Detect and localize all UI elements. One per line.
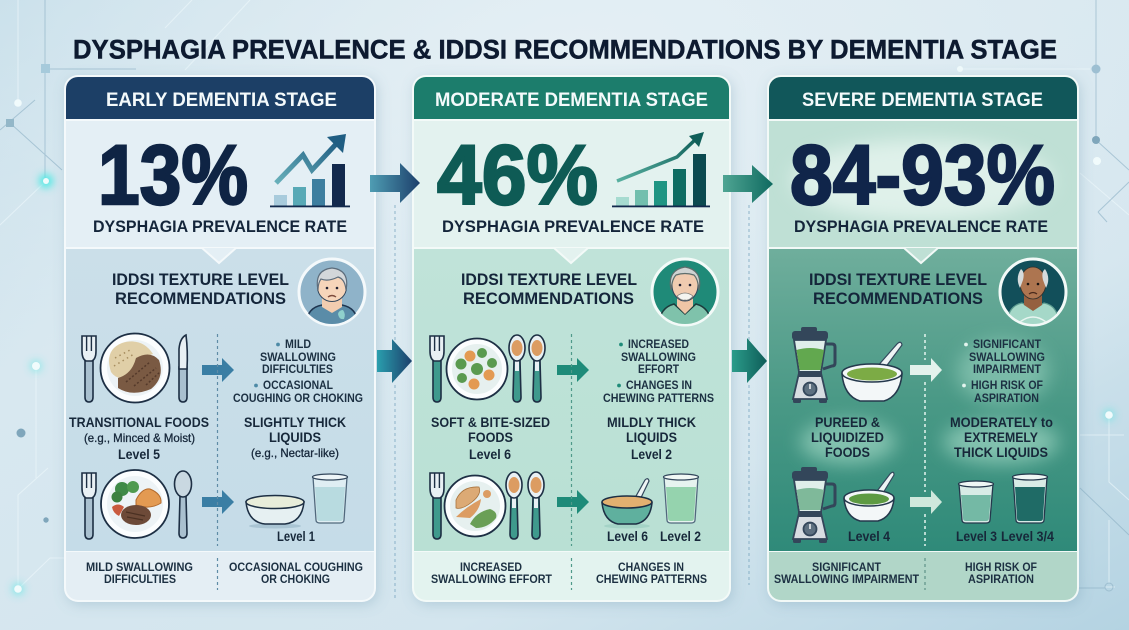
symptoms list: severe (962, 339, 1045, 405)
footer: early symptoms (86, 562, 363, 586)
symptoms list: early: OCCASIONAL (263, 380, 333, 392)
foods row 2: balanced plate (82, 470, 192, 539)
panel heading: early: EARLY DEMENTIA STAGE (106, 89, 337, 111)
footer: moderate symptoms: INCREASED (460, 562, 522, 574)
liquid label: mildly thick: Level 2 (631, 447, 672, 462)
liquid label: moderately to extremely thick: THICK LIQUIDS (954, 444, 1048, 460)
food label: soft and bite-sized (431, 414, 550, 462)
title: DYSPHAGIA PREVALENCE & IDDSI RECOMMENDATIONS BY DEMENTIA STAGE (73, 34, 1057, 64)
footer: moderate symptoms: CHANGES IN (618, 562, 684, 574)
icon: older man avatar (652, 259, 718, 326)
symptoms list: moderate: EFFORT (638, 364, 679, 376)
symptoms list: severe: SIGNIFICANT (973, 339, 1041, 351)
footer: severe symptoms: SWALLOWING IMPAIRMENT (774, 574, 919, 586)
heading: IDDSI recommendations: IDDSI TEXTURE LEVEL (112, 270, 289, 289)
arrow: severe row 1 (910, 358, 942, 382)
label: dysphagia prevalence rate: DYSPHAGIA PREVALENCE RATE (442, 217, 704, 236)
symptoms list: moderate (603, 339, 714, 405)
footer: early symptoms: MILD SWALLOWING (86, 562, 193, 574)
heading: IDDSI recommendations (809, 270, 987, 308)
liquid label: slightly thick liquids: LIQUIDS (269, 429, 321, 445)
statistic: 46%: 46% (437, 128, 598, 222)
statistic: 84-93%: 84-93% (790, 128, 1055, 222)
liquid label: mildly thick: MILDLY THICK (607, 414, 696, 430)
arrow: moderate to severe, prevalence (723, 165, 773, 203)
liquid label: moderately to extremely thick: MODERATELY to (950, 414, 1053, 430)
food label: pureed and liquidized: LIQUIDIZED (811, 429, 884, 445)
heading: IDDSI recommendations: RECOMMENDATIONS (813, 289, 983, 308)
footer: early symptoms: DIFFICULTIES (104, 574, 176, 586)
footer: moderate symptoms: CHEWING PATTERNS (596, 574, 707, 586)
foods row 1: blender and puree bowl (792, 327, 902, 403)
arrow: moderate row 2 (557, 490, 589, 514)
liquid label: moderately to extremely thick (950, 414, 1053, 460)
liquid label: slightly thick liquids (244, 414, 346, 460)
footer: severe symptoms: HIGH RISK OF (965, 562, 1037, 574)
icon: frail elder avatar (1000, 259, 1066, 326)
icon: older woman avatar (299, 259, 365, 326)
labels: level 6 and level 2 (607, 529, 701, 544)
heading: IDDSI recommendations (461, 270, 637, 308)
panel heading: moderate: MODERATE DEMENTIA STAGE (435, 89, 708, 111)
panel: early dementia stage (64, 75, 376, 602)
food label: pureed and liquidized (811, 414, 884, 460)
liquid label: moderately to extremely thick: EXTREMELY (964, 429, 1039, 445)
food label: transitional foods: TRANSITIONAL FOODS (69, 414, 209, 430)
foods row 1: bite-sized plate (430, 335, 545, 402)
label: level 1: Level 1 (277, 529, 315, 544)
symptoms list: early: COUGHING OR CHOKING (233, 393, 363, 405)
arrow: severe row 2 (910, 490, 942, 514)
label: level 4: Level 4 (848, 529, 890, 544)
label: dysphagia prevalence rate: DYSPHAGIA PREVALENCE RATE (794, 217, 1048, 236)
symptoms list: early: DIFFICULTIES (262, 364, 333, 376)
symptoms list: moderate: INCREASED (628, 339, 689, 351)
labels: level 6 and level 2: Level 2 (660, 529, 701, 544)
footer: moderate symptoms: SWALLOWING EFFORT (431, 574, 552, 586)
liquid label: slightly thick liquids: (e.g., Nectar-like) (251, 446, 339, 460)
labels: level 3 and level 3/4: Level 3/4 (1001, 529, 1054, 544)
symptoms list: moderate: SWALLOWING (621, 352, 696, 364)
icon: bowl and glass, levels 6 and 2 (602, 474, 698, 528)
food label: transitional foods (69, 414, 209, 462)
icon: bowl and glass, level 1 (246, 474, 348, 528)
foods row 2: blender and bowl (792, 467, 894, 543)
heading: IDDSI recommendations (112, 270, 289, 308)
symptoms list: severe: HIGH RISK OF (971, 380, 1043, 392)
panel: severe dementia stage (767, 75, 1079, 602)
footer: moderate symptoms (431, 562, 707, 586)
arrow: early to moderate, prevalence (370, 163, 420, 203)
footer: severe symptoms: ASPIRATION (968, 574, 1034, 586)
food label: transitional foods: (e.g., Minced & Moist) (84, 431, 195, 445)
statistic: 13%: 13% (98, 128, 248, 222)
symptoms list: moderate: CHEWING PATTERNS (603, 393, 714, 405)
footer: early symptoms: OCCASIONAL COUGHING (229, 562, 363, 574)
food label: soft and bite-sized: SOFT & BITE-SIZED (431, 414, 550, 430)
symptoms list: early (233, 339, 363, 405)
symptoms list: severe: ASPIRATION (974, 393, 1039, 405)
arrow: early to moderate, recommendations (377, 339, 412, 383)
arrow: early row 1 (202, 358, 234, 382)
chart icon: rising bars (612, 132, 710, 207)
heading: IDDSI recommendations: IDDSI TEXTURE LEVEL (809, 270, 987, 289)
footer: severe symptoms (774, 562, 1037, 586)
food label: pureed and liquidized: FOODS (825, 444, 870, 460)
arrow: early row 2 (202, 490, 234, 514)
icon: two glasses, levels 3 and 3/4 (958, 474, 1048, 523)
symptoms list: severe: IMPAIRMENT (973, 364, 1041, 376)
footer: early symptoms: OR CHOKING (261, 574, 330, 586)
liquid label: mildly thick: LIQUIDS (626, 429, 677, 445)
arrow: moderate row 1 (557, 358, 589, 382)
label: dysphagia prevalence rate: DYSPHAGIA PREVALENCE RATE (93, 217, 347, 236)
symptoms list: early: MILD (285, 339, 311, 351)
symptoms list: early: SWALLOWING (260, 352, 336, 364)
liquid label: mildly thick (607, 414, 696, 462)
liquid label: slightly thick liquids: SLIGHTLY THICK (244, 414, 346, 430)
heading: IDDSI recommendations: IDDSI TEXTURE LEVEL (461, 270, 637, 289)
food label: soft and bite-sized: FOODS (468, 429, 513, 445)
food label: transitional foods: Level 5 (118, 447, 160, 462)
footer: severe symptoms: SIGNIFICANT (812, 562, 881, 574)
food label: soft and bite-sized: Level 6 (469, 447, 511, 462)
foods row 1: minced and moist plate (82, 334, 187, 402)
symptoms list: severe: SWALLOWING (969, 352, 1045, 364)
panel: moderate dementia stage (412, 75, 731, 602)
chart icon: rising bars (270, 134, 350, 207)
symptoms list: moderate: CHANGES IN (626, 380, 692, 392)
arrow: moderate to severe, recommendations (732, 338, 767, 383)
labels: level 3 and level 3/4 (956, 529, 1054, 544)
panel heading: severe: SEVERE DEMENTIA STAGE (802, 89, 1043, 111)
heading: IDDSI recommendations: RECOMMENDATIONS (463, 289, 634, 308)
heading: IDDSI recommendations: RECOMMENDATIONS (115, 289, 286, 308)
food label: pureed and liquidized: PUREED & (815, 414, 880, 430)
labels: level 6 and level 2: Level 6 (607, 529, 648, 544)
labels: level 3 and level 3/4: Level 3 (956, 529, 997, 544)
foods row 2: chopped plate (430, 472, 544, 539)
